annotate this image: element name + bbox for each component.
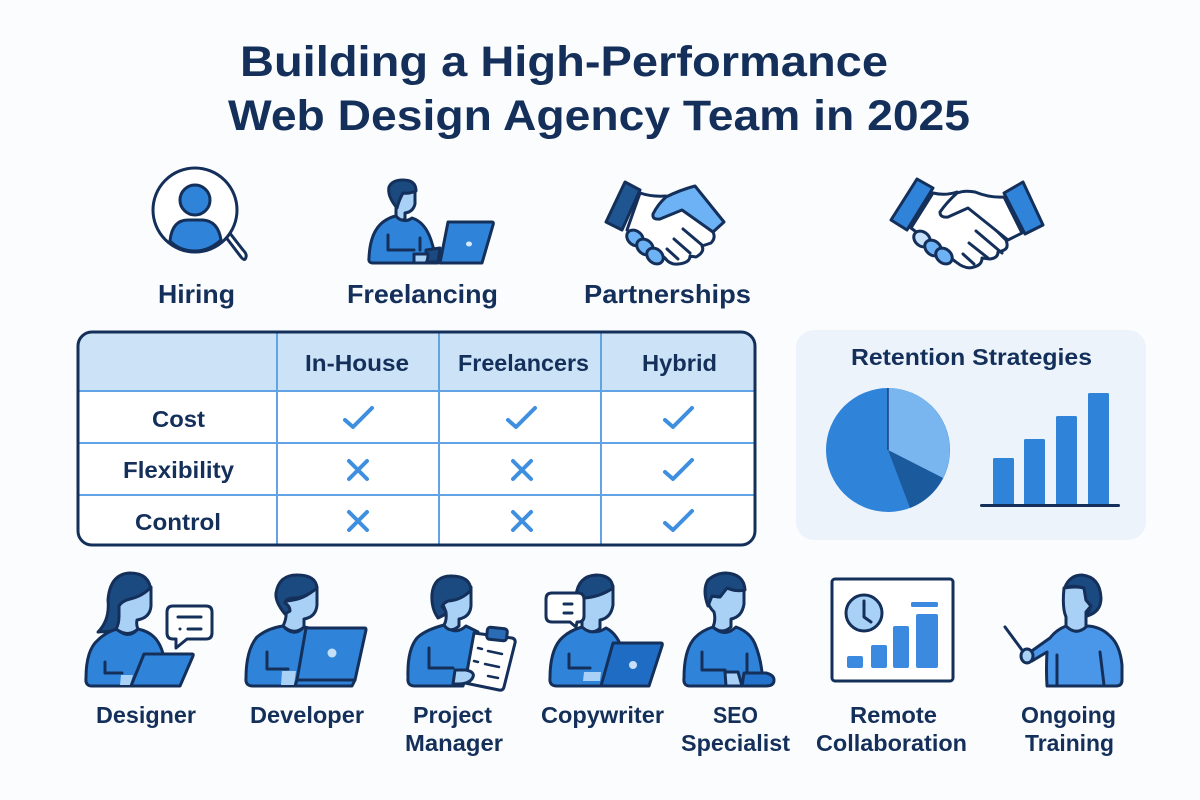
label: copywriter: Copywriter (541, 702, 664, 728)
label: seo specialist: Specialist (681, 730, 790, 756)
table row labels: Cost (152, 406, 205, 432)
title (228, 38, 970, 140)
panel: comparison table (78, 332, 755, 545)
icon: remote collaboration dashboard (832, 579, 953, 681)
label: freelancing: Freelancing (347, 279, 498, 309)
heading: retention strategies: Retention Strategies (851, 344, 1092, 370)
icon: partnerships handshake (606, 182, 724, 267)
icon: freelancer with laptop (369, 180, 493, 263)
panel: retention strategies (796, 330, 1146, 540)
label: ongoing training: Training (1025, 730, 1114, 756)
pie chart (826, 388, 950, 512)
icon: project manager (408, 576, 515, 690)
icon: ongoing training (1005, 575, 1122, 686)
title: Building a High-Performance (240, 38, 888, 86)
title: Web Design Agency Team in 2025 (228, 92, 970, 140)
icon: developer (246, 575, 366, 686)
label: designer: Designer (96, 702, 196, 728)
label: ongoing training (1021, 702, 1116, 756)
label: developer: Developer (250, 702, 364, 728)
icon: second handshake (891, 179, 1043, 268)
bar chart (980, 393, 1120, 507)
table row labels: Control (135, 509, 221, 535)
icon: copywriter (546, 575, 662, 686)
table row labels: Flexibility (123, 457, 234, 483)
icon: seo specialist (684, 573, 774, 686)
table column headers: Freelancers (458, 350, 589, 376)
table row labels (123, 406, 234, 535)
label: project manager (405, 702, 503, 756)
icon: hiring magnifier (153, 168, 246, 260)
label: project manager: Manager (405, 730, 503, 756)
label: remote collaboration (816, 702, 967, 756)
label: seo specialist: SEO (713, 702, 758, 728)
label: remote collaboration: Remote (850, 702, 937, 728)
label: project manager: Project (413, 702, 492, 728)
label: seo specialist (681, 702, 790, 756)
label: hiring: Hiring (158, 279, 235, 309)
label: remote collaboration: Collaboration (816, 730, 967, 756)
icon: designer (86, 573, 212, 686)
label: partnerships: Partnerships (584, 279, 751, 309)
table column headers: In-House (305, 350, 409, 376)
table column headers: Hybrid (642, 350, 717, 376)
table check and cross marks (345, 408, 692, 530)
label: ongoing training: Ongoing (1021, 702, 1116, 728)
table column headers (305, 350, 717, 376)
